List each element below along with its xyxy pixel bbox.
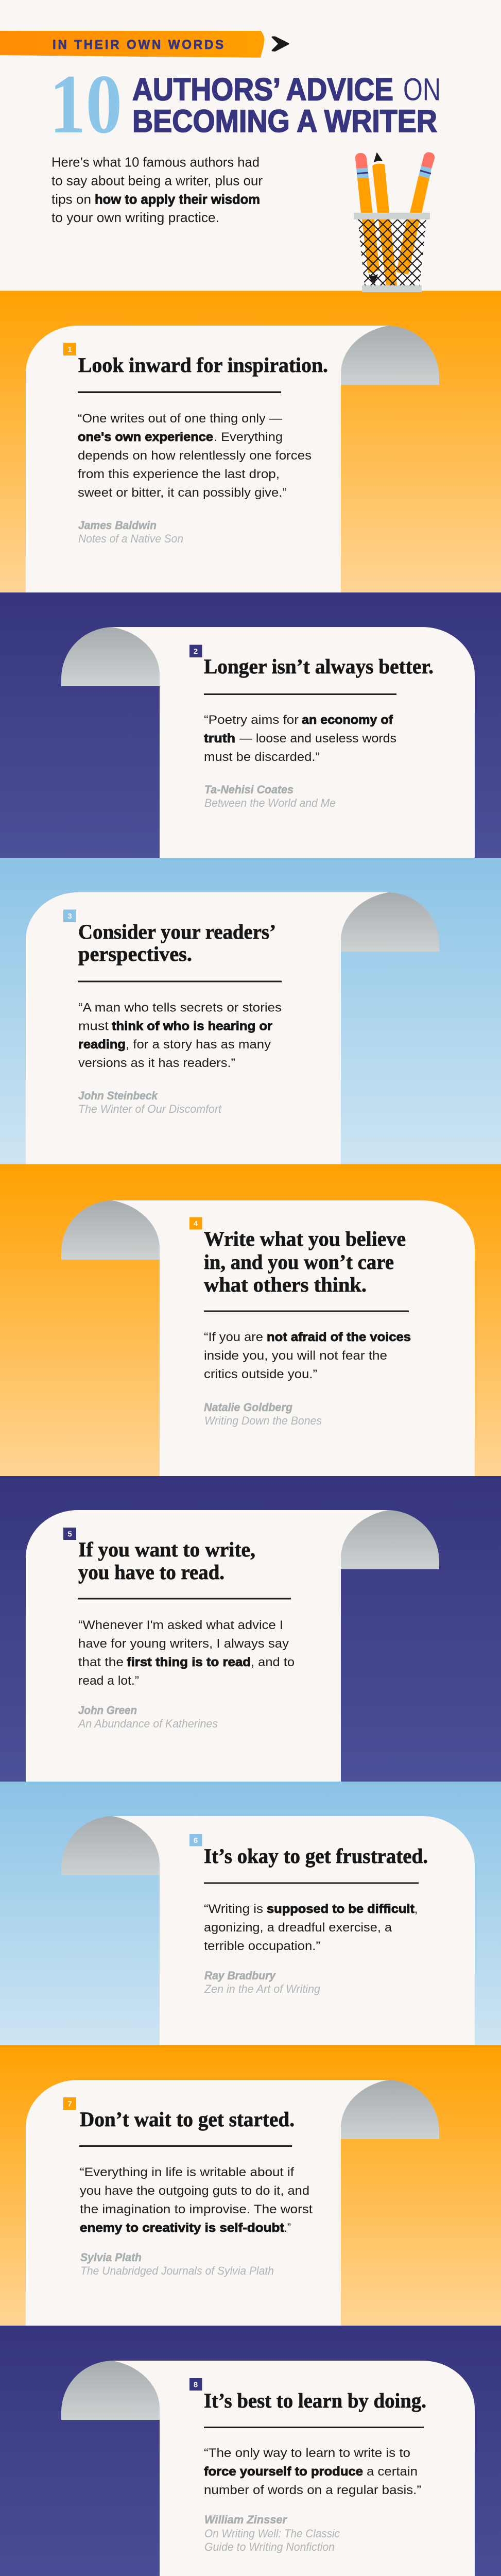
attribution [77,1704,218,1730]
icon: chevron arrow [272,37,288,50]
attribution: John Steinbeck [78,1089,159,1102]
page curl tab [61,1200,160,1260]
heading [78,920,276,965]
title [132,72,441,139]
page curl tab [341,892,439,952]
quote [204,2446,421,2497]
card [112,1816,475,2045]
title: ON [403,72,441,107]
quote: supposed to be difficult [267,1902,414,1916]
quote: “Everything in life is writable about if [80,2165,294,2179]
number badge 8: 8 [194,2380,198,2389]
heading: Look inward for inspiration. [78,353,328,377]
pencil middle [372,153,389,213]
quote [78,412,312,500]
intro text: how to apply their wisdom [95,192,260,207]
quote [204,1330,411,1381]
heading [204,1227,406,1296]
quote: truth [204,732,235,745]
quote [204,713,396,764]
quote: “If you are [204,1330,263,1344]
cup rim [354,213,430,219]
heading: Don’t wait to get started. [80,2108,295,2131]
attribution: William Zinsser [204,2513,287,2526]
attribution: Ray Bradbury [204,1969,277,1982]
attribution: Ta-Nehisi Coates [204,783,293,796]
quote: “Whenever I'm asked what advice I [78,1618,283,1632]
attribution: On Writing Well: The Classic [204,2527,340,2540]
attribution: James Baldwin [78,519,157,532]
number badge 2: 2 [194,647,198,656]
attribution [204,783,336,809]
quote: — loose and useless words [239,732,396,745]
card [26,326,389,592]
quote: one's own experience [78,430,213,444]
attribution [78,519,183,545]
heading: Consider your readers’ [78,920,276,943]
quote: critics outside you.” [204,1367,317,1381]
attribution [80,2251,274,2277]
attribution: Zen in the Art of Writing [204,1982,321,1995]
quote: an economy of [302,713,393,727]
icon: pencil cup [354,152,435,292]
intro text: Here’s what 10 famous authors had [51,155,260,170]
number badge 3 [63,910,76,922]
number badge 1 [63,343,76,355]
quote: “One writes out of one thing only — [78,412,283,426]
page curl tab [61,2361,160,2420]
heading: you have to read. [78,1561,224,1584]
quote: versions as it has readers.” [78,1056,235,1070]
intro text: to your own writing practice. [51,210,219,225]
attribution [204,1969,321,1995]
quote: “A man who tells secrets or stories [78,1001,282,1015]
number badge 7: 7 [67,2100,72,2108]
attribution: John Green [78,1704,137,1717]
title: BECOMING A WRITER [132,104,437,139]
quote: “Poetry aims for [204,713,299,727]
number badge 3: 3 [67,912,72,921]
quote: the imagination to improvise. The worst [80,2202,313,2216]
quote: that the [78,1655,124,1669]
heading: perspectives. [78,942,192,965]
number badge 7 [63,2097,76,2110]
quote: first thing is to read [127,1655,251,1669]
panel: tip 3 [0,858,501,1164]
card [112,627,475,858]
quote: think of who is hearing or [112,1019,272,1033]
quote: agonizing, a dreadful exercise, a [204,1921,392,1935]
attribution: Guide to Writing Nonfiction [204,2540,335,2553]
banner: in their own words: IN THEIR OWN WORDS [53,38,226,52]
panel: tip 8 [0,2326,501,2576]
quote: a certain [367,2465,418,2479]
pencil right [410,152,435,213]
intro text: to say about being a writer, plus our [51,173,263,189]
card [26,892,389,1164]
attribution: The Unabridged Journals of Sylvia Plath [80,2264,274,2277]
attribution [78,1089,222,1115]
number badge 2 [189,645,202,657]
heading: If you want to write, [78,1538,255,1561]
attribution: An Abundance of Katherines [77,1717,218,1730]
heading: It’s best to learn by doing. [204,2389,426,2412]
quote [204,1902,418,1953]
page curl tab [341,1510,439,1569]
quote: must [78,1019,109,1033]
attribution [204,1401,322,1427]
attribution: Sylvia Plath [80,2251,142,2264]
number badge 4: 4 [194,1219,198,1228]
heading: Write what you believe [204,1227,406,1250]
quote: sweet or bitter, it can possibly give.” [78,486,287,500]
number badge 5 [63,1528,76,1540]
panel: tip 2 [0,592,501,858]
quote: , for a story has as many [126,1038,271,1052]
quote: .” [284,2221,291,2235]
panel: tip 1 [0,291,501,592]
quote: have for young writers, I always say [78,1637,289,1651]
number badge 6 [189,1834,202,1846]
card [112,2361,475,2576]
number badge 6: 6 [194,1836,198,1845]
quote: depends on how relentlessly one forces [78,449,312,463]
quote: , and to [251,1655,295,1669]
number badge 1: 1 [67,345,72,354]
heading: Longer isn’t always better. [204,655,434,678]
attribution: Notes of a Native Son [78,532,183,545]
intro text: tips on [51,192,91,207]
panel: tip 6 [0,1782,501,2045]
cup base [362,285,422,292]
number badge 5: 5 [67,1530,72,1538]
number badge 8 [189,2378,202,2391]
big number 10: 10 [49,58,122,151]
page curl tab [341,326,439,385]
heading: what others think. [204,1273,367,1296]
quote: , [414,1902,418,1916]
cup mesh [355,219,430,286]
page curl tab [61,627,160,686]
quote: must be discarded.” [204,750,320,764]
quote: enemy to creativity is self-doubt [80,2221,284,2235]
quote: not afraid of the voices [267,1330,411,1344]
header panel [0,0,501,292]
quote: inside you, you will not fear the [204,1349,387,1363]
page curl tab [61,1816,160,1875]
quote: reading [78,1038,126,1052]
quote: . Everything [214,430,283,444]
quote [78,1001,282,1070]
intro text [51,155,263,225]
quote: you have the outgoing guts to do it, and [80,2184,309,2198]
panel: tip 7 [0,2045,501,2326]
card [26,1510,389,1782]
title: AUTHORS’ ADVICE [132,72,393,107]
quote: terrible occupation.” [204,1939,320,1953]
heading [78,1538,255,1584]
card [112,1200,475,1476]
panel: tip 5 [0,1476,501,1782]
heading: in, and you won’t care [204,1250,394,1274]
attribution: Writing Down the Bones [204,1414,322,1427]
card [26,2080,389,2326]
quote: from this experience the last drop, [78,467,280,481]
quote [80,2165,313,2235]
attribution: Between the World and Me [204,796,336,809]
quote: “The only way to learn to write is to [204,2446,410,2460]
quote: read a lot.” [78,1674,139,1688]
panel: tip 4 [0,1164,501,1476]
attribution [204,2513,340,2553]
banner: in their own words [0,31,265,58]
quote [78,1618,295,1688]
attribution: Natalie Goldberg [204,1401,293,1414]
page curl tab [341,2080,439,2139]
quote: number of words on a regular basis.” [204,2483,421,2497]
number badge 4 [189,1217,202,1229]
quote: force yourself to produce [204,2465,363,2479]
pencil left [355,153,373,213]
attribution: The Winter of Our Discomfort [78,1103,222,1115]
quote: “Writing is [204,1902,263,1916]
heading: It’s okay to get frustrated. [204,1844,428,1868]
